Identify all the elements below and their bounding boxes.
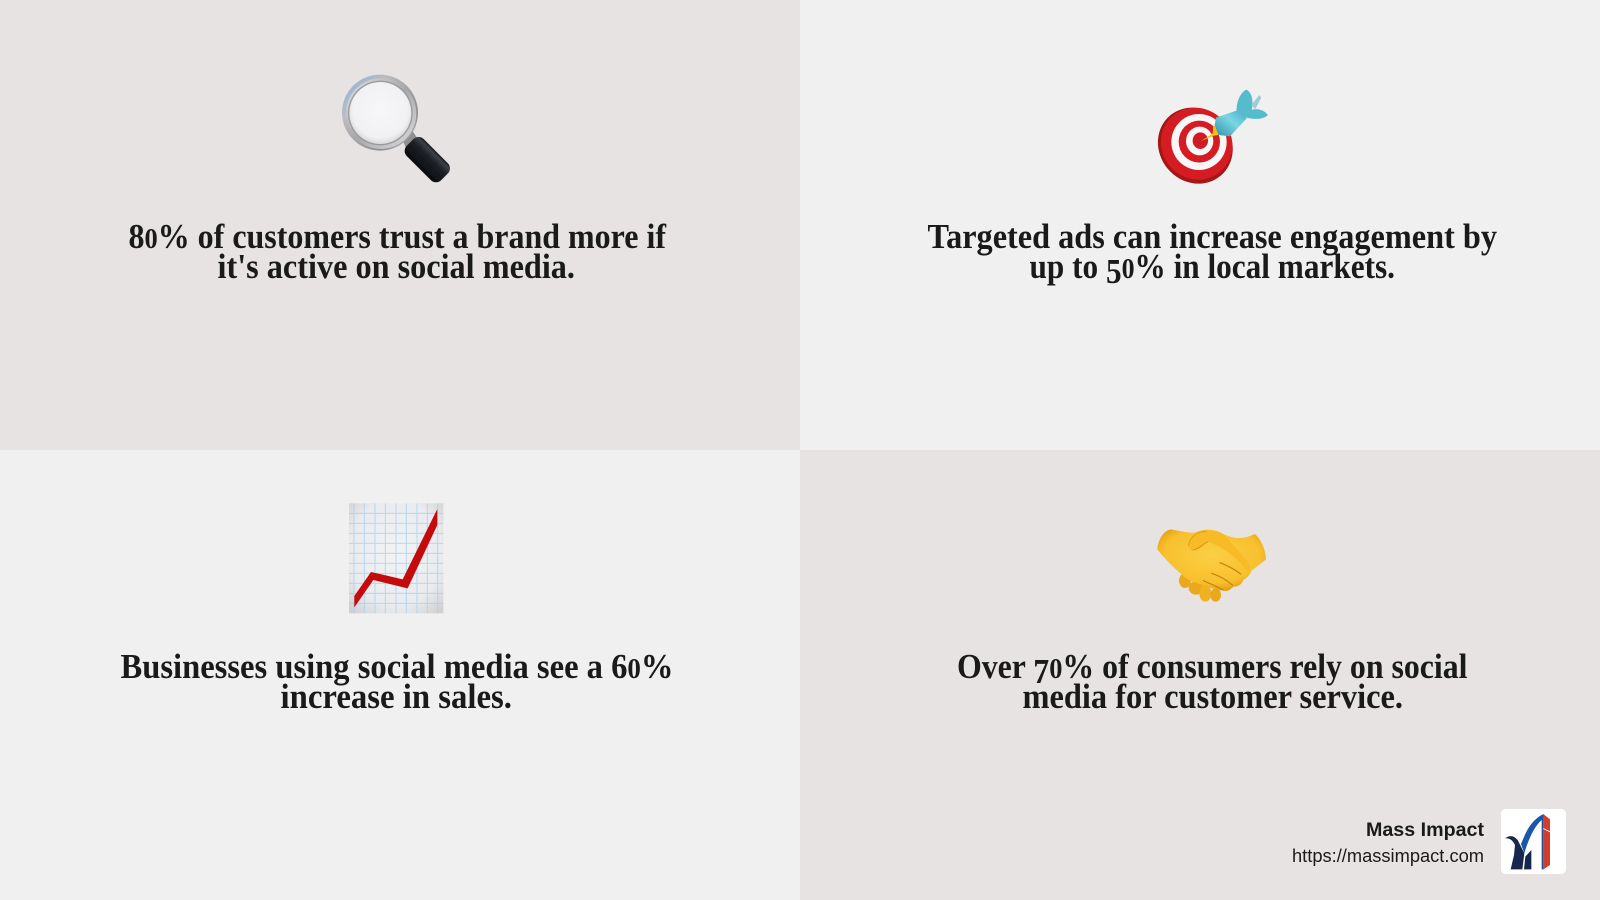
panel: sales increase [0,450,800,900]
statement: targeted ads: 0 [1122,253,1135,285]
statement: customer service: 0 [1049,653,1062,685]
statement: customer service: % of consumers rely on social [1062,647,1508,686]
statement: targeted ads: 5 [1106,252,1122,291]
icon: handshake [1157,529,1266,602]
brand url: https://massimpact.com [1292,846,1484,866]
statement: sales increase [120,647,674,716]
statement: customer trust: 80% of customers trust a brand more if [128,217,666,256]
statement: sales increase: increase in sales. [280,677,512,716]
statement: targeted ads [928,217,1497,291]
statement: customer service: Over [957,647,1032,686]
statement: targeted ads: % in local markets. [1135,247,1426,286]
icon: dart and target [1142,90,1268,199]
statement: customer service: media for customer service. [1022,677,1403,716]
logo [1501,809,1566,874]
panel: customer service [800,450,1600,900]
statement: targeted ads: Targeted ads can increase engagement by [928,217,1497,256]
statement: targeted ads: up to [1030,247,1106,286]
brand name: Mass Impact [1366,820,1485,841]
icon: magnifying glass [342,75,453,185]
brand footer [1292,809,1566,874]
icon: rising chart [349,503,443,613]
statement: sales increase: Businesses using social media see a 60% [120,647,674,686]
statement: customer trust [128,217,666,286]
statement: customer service [957,647,1468,716]
statement: customer trust: it's active on social media. [218,247,575,286]
statement: customer service: 7 [1033,652,1049,691]
panel: customer trust [0,0,800,450]
panel: targeted ads [800,0,1600,450]
